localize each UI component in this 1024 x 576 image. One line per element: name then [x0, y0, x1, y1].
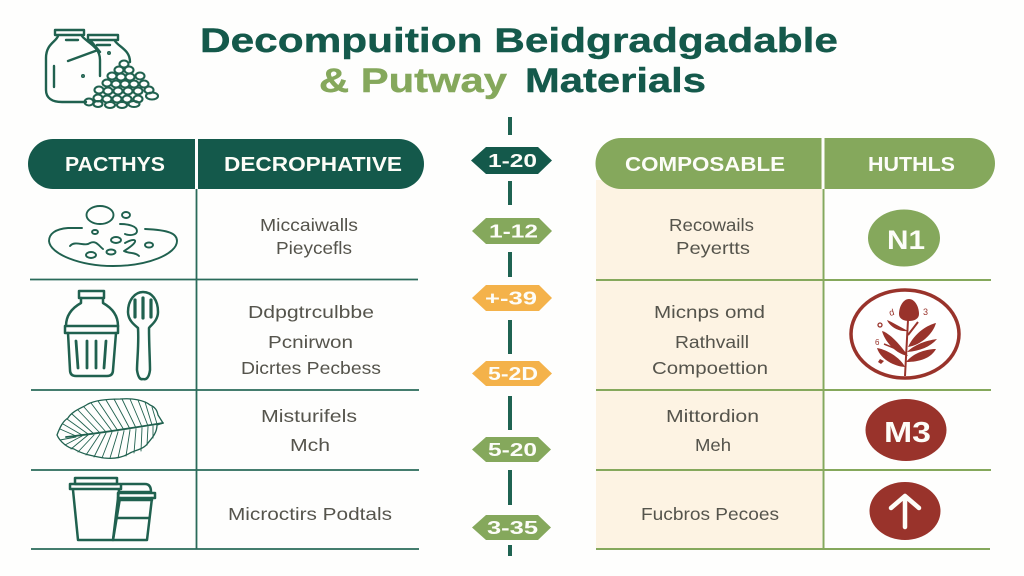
left row text: Miccaiwalls [260, 215, 358, 235]
title: Decompuition Beidgradgadable [200, 22, 838, 60]
left row text: Misturifels [261, 406, 357, 426]
panel: left table [28, 139, 424, 549]
right grid lines [596, 189, 991, 549]
icon: jars with pile of pellets [46, 30, 158, 108]
badge: 5-20: 5-20 [488, 439, 537, 460]
left row text [228, 215, 392, 524]
right row text: Rathvaill [675, 332, 749, 352]
panel: right table [596, 138, 995, 549]
badge: up arrow [870, 482, 940, 540]
badge: 5-2D: 5-2D [488, 363, 538, 384]
composable column background [596, 180, 822, 549]
left row text: Pieycefls [276, 238, 352, 258]
left header bar: PACTHYS [65, 154, 165, 176]
badge: 1-12 [472, 218, 552, 244]
badge: N1 [868, 210, 940, 266]
badge: 5-2D [472, 361, 552, 386]
right row text: Peyertts [676, 238, 750, 258]
left row text: Ddpgtrculbbe [248, 302, 374, 322]
timeline: centre dashes [508, 117, 512, 556]
badge: +-39 [472, 285, 552, 311]
icon: plant seal: d [888, 307, 895, 318]
left row text: Mch [290, 435, 330, 455]
icon: plant seal: 3 [923, 307, 928, 317]
title [200, 22, 838, 100]
left header bar: DECROPHATIVE [224, 154, 402, 176]
icon: paper cups [70, 478, 155, 540]
badge: 1-20 [471, 147, 552, 174]
left row text: Pcnirwon [268, 332, 353, 352]
icon: plant seal [851, 290, 959, 378]
right row text: Compoettion [652, 358, 768, 378]
title: Materials [525, 62, 706, 100]
badge: M3: M3 [884, 417, 931, 449]
badge: 1-12: 1-12 [489, 220, 538, 242]
icon: bottle and spatula [65, 291, 158, 379]
right row text [641, 215, 779, 524]
right row text: Mittordion [666, 406, 759, 426]
badge: 3-35: 3-35 [487, 517, 538, 538]
icon: leaf [57, 399, 163, 458]
right row text: Fucbros Pecoes [641, 504, 779, 524]
icon: plant seal: 6 [875, 338, 880, 347]
icon: food scraps [49, 206, 177, 266]
right header bar: HUTHLS [868, 154, 955, 176]
badge: 1-20: 1-20 [488, 150, 537, 171]
right row text: Meh [695, 435, 731, 455]
right row text: Recowails [669, 215, 754, 235]
badge: 5-20 [472, 437, 551, 462]
right row text: Micnps omd [654, 302, 765, 322]
title: & Putway [319, 62, 507, 100]
right header bar: COMPOSABLE [625, 154, 785, 176]
badge: +-39: +-39 [485, 288, 537, 308]
left header bar [28, 139, 424, 189]
badge: M3 [866, 399, 946, 461]
right header bar [596, 138, 995, 189]
badge: 3-35 [472, 515, 551, 540]
left grid lines [30, 189, 419, 549]
left row text: Microctirs Podtals [228, 504, 392, 524]
badge: N1: N1 [887, 225, 925, 255]
left row text: Dicrtes Pecbess [241, 358, 381, 378]
